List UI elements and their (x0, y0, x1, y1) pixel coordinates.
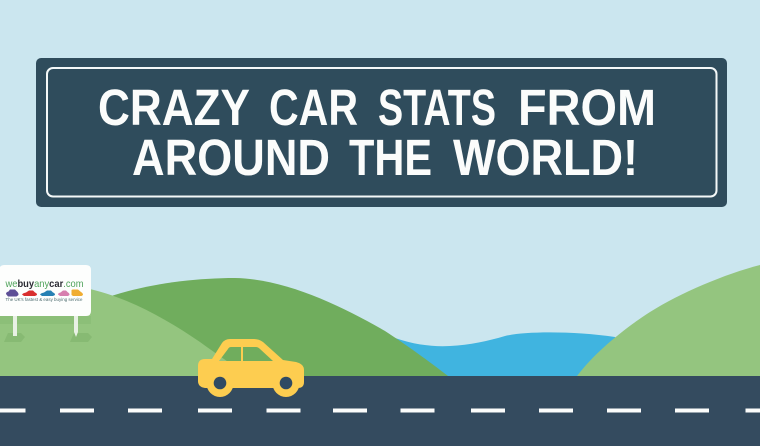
pink car (58, 290, 70, 296)
dark green hill (100, 278, 448, 376)
right wheel arch (272, 370, 300, 397)
title text: STATS (378, 79, 496, 136)
left wheel arch (206, 370, 234, 397)
right wheel hub (280, 377, 292, 389)
light green hill, right (577, 265, 760, 376)
logo small cars (6, 290, 83, 296)
left wheel hub (214, 377, 226, 389)
orange van (72, 290, 83, 296)
sign shadow on hill (0, 316, 91, 324)
icon: yellow car (198, 339, 304, 397)
title text: THE (349, 129, 432, 186)
sign board (0, 265, 91, 316)
title text (98, 79, 656, 186)
title banner (36, 58, 727, 207)
logo tagline: The UK's fastest & easy buying service (6, 297, 83, 302)
banner inner outline (47, 68, 716, 196)
car body with windows (198, 339, 304, 388)
title text: WORLD! (453, 129, 638, 186)
title text: FROM (518, 79, 656, 136)
sign posts (13, 315, 78, 337)
title text: CAR (269, 79, 358, 136)
logo wordmark: webuyanycar.com (5, 278, 84, 290)
title text: CRAZY (98, 79, 250, 136)
light green hill, left (0, 286, 250, 376)
blue car (40, 290, 55, 296)
title text: AROUND (132, 129, 330, 186)
purple car (6, 290, 18, 296)
road (0, 376, 760, 446)
water / lake (395, 332, 640, 376)
banner panel (36, 58, 727, 207)
roadside sign (0, 265, 92, 342)
post shadows (4, 333, 92, 342)
road dashes (0, 408, 760, 412)
red car (22, 290, 37, 296)
